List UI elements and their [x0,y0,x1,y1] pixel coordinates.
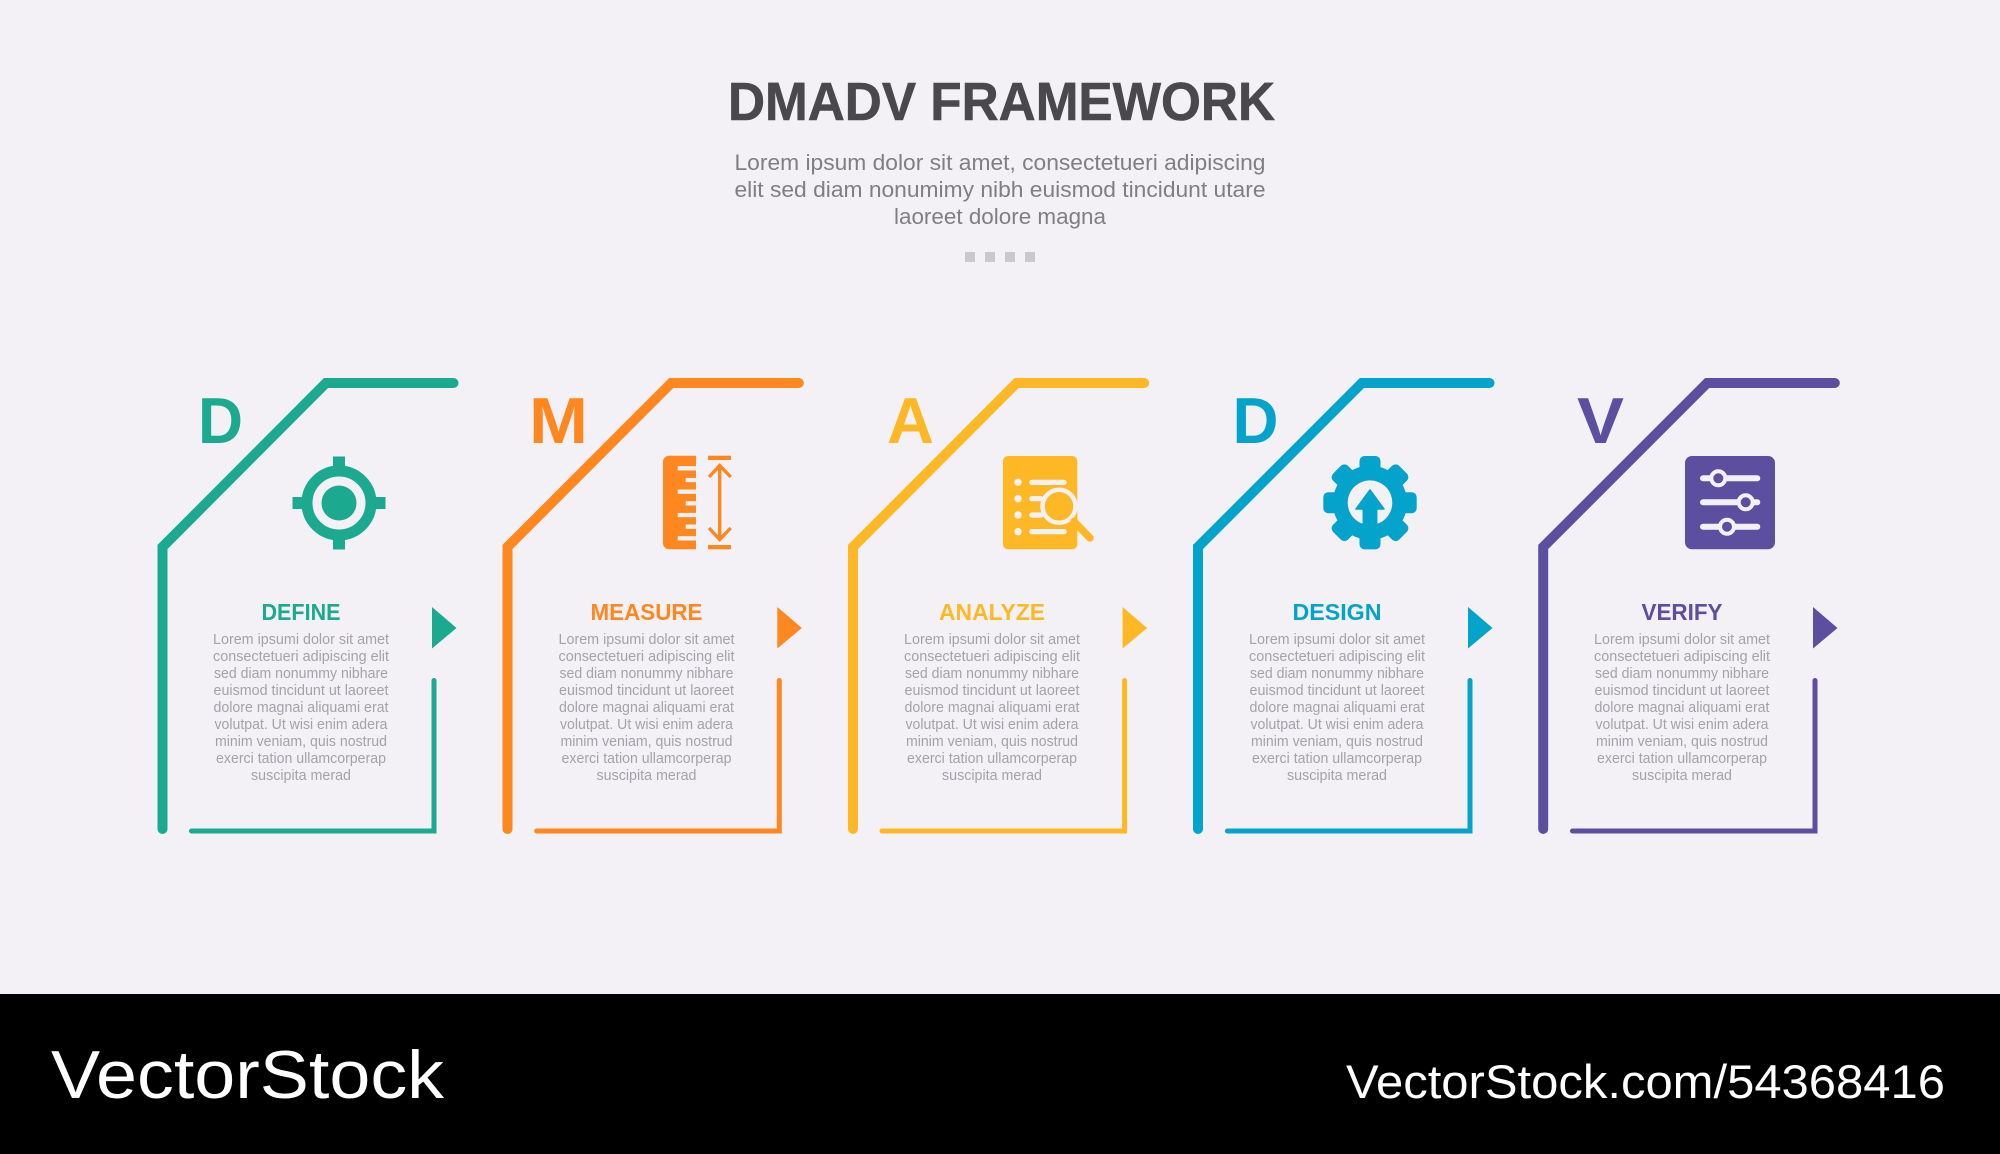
panel: analyze [853,383,1147,831]
subtitle: elit sed diam nonumimy nibh euismod tincidunt utare [734,177,1266,202]
letter V: V [1577,384,1624,457]
body text: minim veniam, quis nostrud [215,733,387,750]
lower frame [1572,680,1815,831]
body text [213,631,390,784]
header [728,72,1275,262]
heading: DEFINE [262,599,340,625]
body text: consectetueri adipiscing elit [213,648,390,665]
body text: consectetueri adipiscing elit [558,648,735,665]
body text: sed diam nonummy nibhare [905,665,1079,682]
body text: exerci tation ullamcorperap [907,750,1077,767]
body text: dolore magnai aliquami erat [214,699,389,716]
body text: Lorem ipsumi dolor sit amet [213,631,390,648]
body text: volutpat. Ut wisi enim adera [906,716,1079,733]
frame [508,383,799,829]
body text: dolore magnai aliquami erat [904,699,1080,716]
lower frame [882,680,1125,831]
body text: minim veniam, quis nostrud [906,733,1078,750]
icon: sliders [1685,456,1775,549]
body text: minim veniam, quis nostrud [560,733,732,750]
arrow [432,607,456,648]
body text: consectetueri adipiscing elit [1249,648,1426,665]
body text: minim veniam, quis nostrud [1596,733,1768,750]
body text: suscipita merad [251,767,351,784]
icon: gear with arrow [1323,456,1417,549]
body text: sed diam nonummy nibhare [1595,665,1769,682]
body text: Lorem ipsumi dolor sit amet [558,631,735,648]
body text: euismod tincidunt ut laoreet [1250,682,1425,699]
arrow [1813,607,1838,648]
letter M: M [529,384,588,457]
body text: consectetueri adipiscing elit [904,648,1081,665]
body text [1594,631,1771,784]
footer brand: VectorStock [51,1037,445,1113]
body text: minim veniam, quis nostrud [1251,733,1423,750]
body text: suscipita merad [596,767,696,784]
frame [1543,383,1835,829]
subtitle [734,150,1266,229]
body text: dolore magnai aliquami erat [559,699,735,716]
icon: document search [1003,456,1090,549]
footer bar [0,994,2000,1154]
body text: consectetueri adipiscing elit [1594,648,1771,665]
body text: suscipita merad [1287,767,1387,784]
lower frame [1227,680,1470,831]
body text: dolore magnai aliquami erat [1250,699,1425,716]
heading: MEASURE [590,599,702,625]
body text [1249,631,1426,784]
panel: measure [508,383,802,831]
body text: exerci tation ullamcorperap [1597,750,1767,767]
panel: design [1198,383,1492,831]
arrow [1468,607,1492,648]
body text: dolore magnai aliquami erat [1594,699,1770,716]
frame [1198,383,1490,829]
letter A: A [887,384,934,457]
body text: euismod tincidunt ut laoreet [214,682,389,699]
body text: suscipita merad [1632,767,1732,784]
body text [904,631,1081,784]
body text: volutpat. Ut wisi enim adera [560,716,734,733]
lower frame [537,680,779,831]
heading: DESIGN [1292,599,1382,625]
body text: Lorem ipsumi dolor sit amet [904,631,1081,648]
title: DMADV FRAMEWORK [728,72,1275,132]
panel: verify [1543,383,1838,831]
icon: target [292,456,386,550]
body text: euismod tincidunt ut laoreet [904,682,1080,699]
icon: ruler [663,456,731,549]
letter D: D [198,384,243,457]
body text: suscipita merad [942,767,1042,784]
body text: exerci tation ullamcorperap [1252,750,1422,767]
frame [853,383,1144,829]
body text: exerci tation ullamcorperap [216,750,386,767]
letter D: D [1232,384,1278,457]
body text: sed diam nonummy nibhare [1250,665,1424,682]
frame [162,383,454,829]
heading: VERIFY [1642,599,1722,625]
panel: define [162,383,456,831]
body text: euismod tincidunt ut laoreet [559,682,735,699]
body text: exerci tation ullamcorperap [562,750,732,767]
body text [558,631,735,784]
body text: sed diam nonummy nibhare [214,665,388,682]
body text: Lorem ipsumi dolor sit amet [1594,631,1771,648]
arrow [777,607,802,648]
subtitle: Lorem ipsum dolor sit amet, consectetueri adipiscing [734,150,1266,175]
subtitle: laoreet dolore magna [894,204,1106,229]
body text: volutpat. Ut wisi enim adera [214,716,388,733]
lower frame [192,680,434,831]
body text: sed diam nonummy nibhare [560,665,734,682]
body text: Lorem ipsumi dolor sit amet [1249,631,1426,648]
arrow [1123,607,1147,648]
footer url: VectorStock.com/54368416 [1346,1055,1945,1108]
body text: volutpat. Ut wisi enim adera [1250,716,1424,733]
body text: euismod tincidunt ut laoreet [1594,682,1770,699]
dots divider [965,252,1035,262]
heading: ANALYZE [939,599,1045,625]
body text: volutpat. Ut wisi enim adera [1596,716,1769,733]
